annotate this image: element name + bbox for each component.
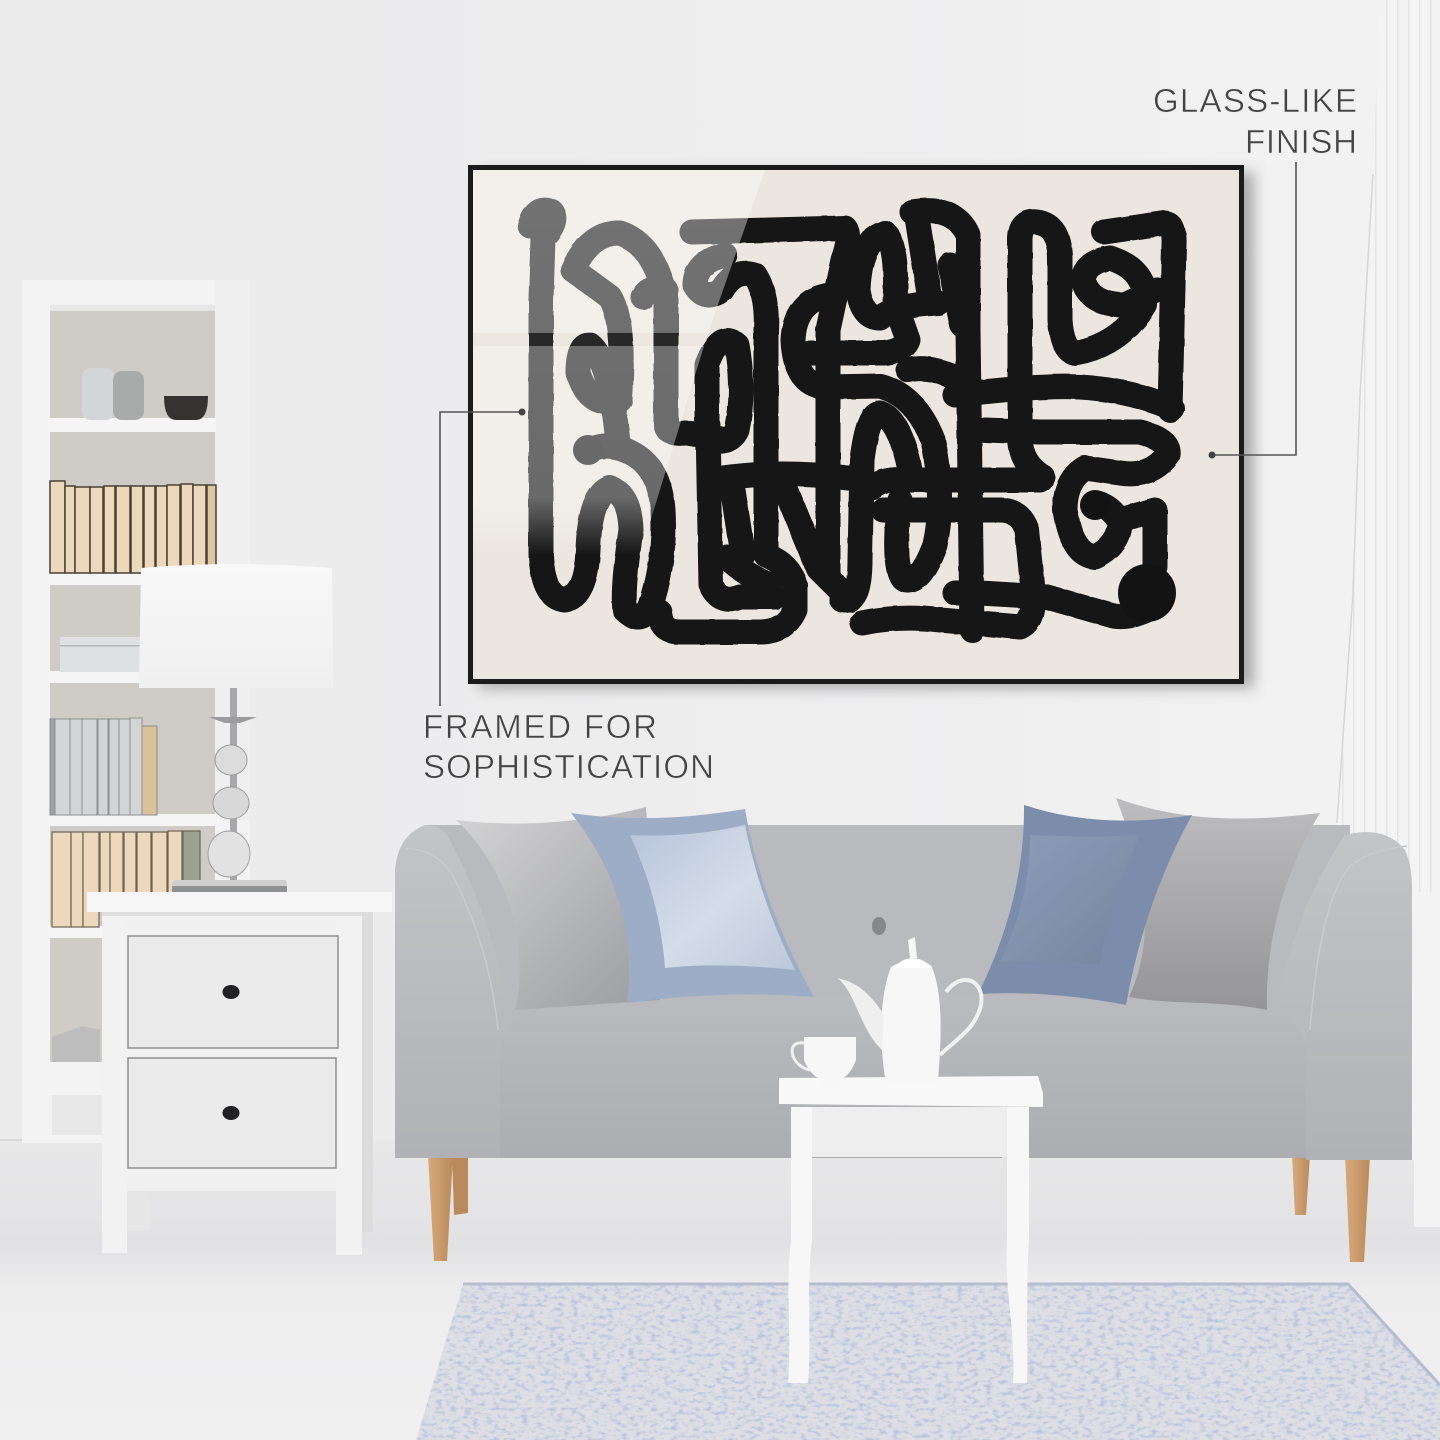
shelf books: lower	[52, 831, 200, 927]
sofa right arm	[1274, 832, 1412, 1160]
rug	[416, 1284, 1440, 1440]
framed artwork	[468, 165, 1254, 688]
table lamp	[139, 564, 333, 897]
bookshelf	[22, 280, 250, 1143]
pillow: blue right	[978, 805, 1192, 1005]
pillow: grey right	[1116, 798, 1320, 1010]
callout: framed for sophistication: SOPHISTICATION	[423, 748, 714, 785]
shelf box	[60, 637, 140, 672]
callout: framed for sophistication: FRAMED FOR	[423, 708, 657, 745]
callout: glass-like finish	[1153, 82, 1357, 458]
window curtain	[1337, 0, 1440, 1227]
sofa	[395, 825, 1412, 1262]
pillow: blue left	[571, 809, 814, 1003]
shelf vases	[82, 368, 208, 420]
glass reflection	[473, 170, 765, 555]
pillow: grey left	[456, 807, 660, 1010]
sofa button	[872, 917, 886, 935]
sofa left arm	[395, 825, 511, 1158]
callout: glass-like finish: FINISH	[1245, 123, 1357, 160]
pillows	[456, 798, 1320, 1010]
shelf books: grey	[50, 718, 157, 815]
nightstand	[87, 892, 392, 1255]
abstract brush strokes	[530, 210, 1174, 632]
callout: glass-like finish: GLASS-LIKE	[1153, 82, 1357, 119]
sofa legs	[428, 1155, 1370, 1262]
side table	[779, 1076, 1043, 1383]
shelf silver dish	[52, 1026, 100, 1062]
shelf books: cream	[50, 481, 216, 573]
callout: framed for sophistication	[423, 408, 714, 785]
sofa seat cushion	[500, 996, 1306, 1158]
teapot and cup	[792, 937, 981, 1087]
